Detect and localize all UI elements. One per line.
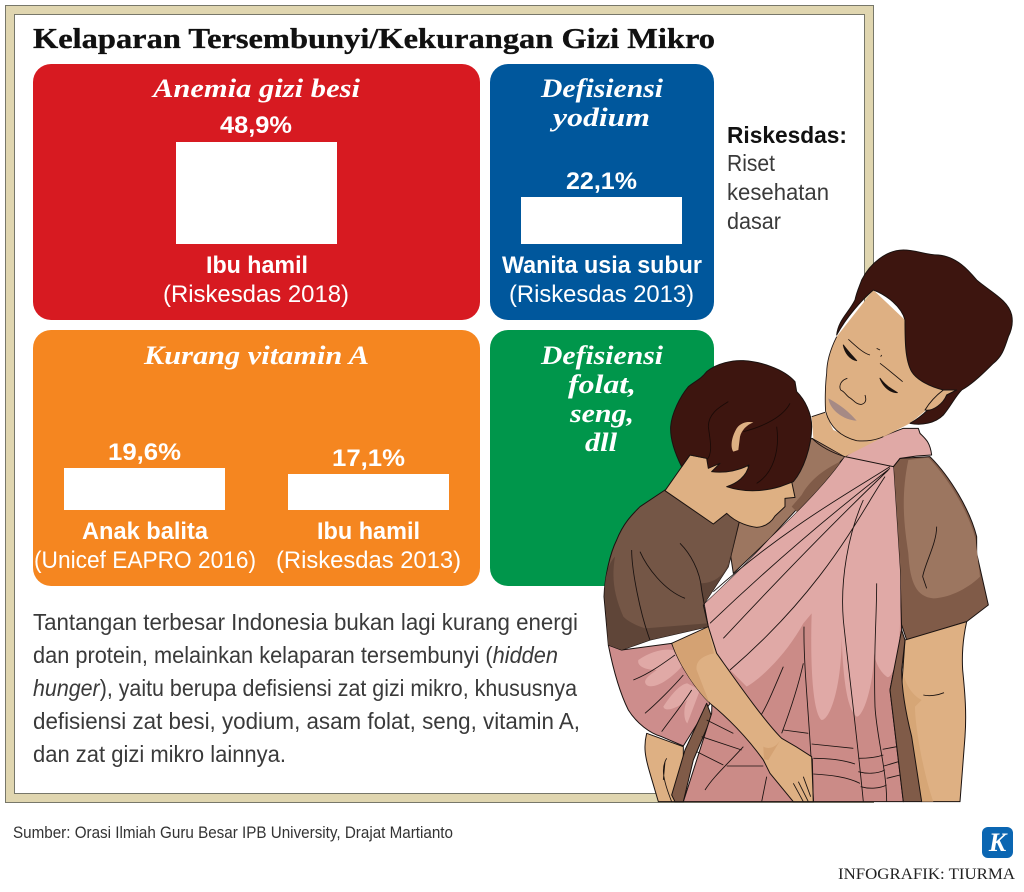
- child shirt folds: [632, 543, 708, 640]
- frame: [6, 6, 874, 802]
- logo: Kompas: [982, 827, 1013, 858]
- mother left fingers: [663, 758, 672, 802]
- bar: 19,6%: [64, 468, 225, 510]
- sleeve highlight: [904, 458, 980, 598]
- mother body: [604, 428, 988, 802]
- mother left hand: [645, 733, 683, 802]
- back sling folds: [633, 655, 692, 732]
- illustration: mother and child: [604, 250, 1012, 802]
- heading: kurang vitamin A: Kurang vitamin A: [143, 341, 369, 370]
- heading: defisiensi yodium: yodium: [549, 103, 650, 132]
- note: riskesdas: [727, 122, 847, 234]
- panel: defisiensi yodium: [490, 64, 714, 320]
- value: 17,1%: 17,1%: [332, 445, 405, 472]
- mother brows and nose: [840, 339, 903, 404]
- mother face: [825, 290, 947, 441]
- logo: Kompas: K: [988, 828, 1008, 857]
- value: 19,6%: 19,6%: [108, 439, 181, 466]
- label: anak balita: Anak balita: [82, 518, 209, 545]
- heading: defisiensi folat seng dll: [540, 341, 664, 457]
- bar: 48,9%: [176, 142, 337, 244]
- heads: [665, 250, 1012, 527]
- label: ibu hamil: Ibu hamil: [317, 518, 420, 545]
- sling folds: [697, 467, 900, 802]
- mother eyes: [843, 345, 897, 393]
- source: unicef: (Unicef EAPRO 2016): [34, 547, 256, 574]
- label: ibu hamil: Ibu hamil: [206, 252, 308, 279]
- back sling: [608, 643, 710, 746]
- strap: [672, 703, 712, 802]
- child face: [665, 455, 795, 527]
- sling knot: [845, 428, 932, 467]
- bar: 17,1%: [288, 474, 449, 510]
- heading: defisiensi yodium: Defisiensi: [540, 74, 664, 103]
- neck outline: [812, 412, 845, 457]
- title: Kelaparan Tersembunyi/Kekurangan Gizi Mikro: [33, 23, 715, 55]
- source: riskesdas 2013: (Riskesdas 2013): [276, 547, 461, 574]
- child arm: [672, 627, 813, 802]
- child fingers: [793, 758, 813, 802]
- arm shade: [903, 677, 933, 802]
- heading: defisiensi folat seng dll: seng,: [569, 399, 634, 428]
- body text: Tantangan terbesar Indonesia bukan lagi kurang energi: [33, 609, 578, 635]
- panel: kurang vitamin A: [33, 330, 480, 586]
- heading: defisiensi folat seng dll: dll: [585, 428, 618, 457]
- child shirt shadow: [605, 523, 739, 650]
- note: riskesdas: Riset: [727, 150, 776, 176]
- child hair: [671, 361, 812, 491]
- panel: defisiensi folat seng: [490, 330, 714, 586]
- strap right: [890, 630, 922, 802]
- body text: dan zat gizi mikro lainnya.: [33, 741, 286, 767]
- child shirt: [604, 490, 739, 650]
- source: Sumber: Orasi Ilmiah Guru Besar IPB University, Drajat Martianto: [13, 824, 453, 842]
- mother right sleeve: [893, 457, 988, 640]
- bar: 22,1%: [521, 197, 682, 244]
- child ear: [732, 422, 753, 452]
- mother hair: [837, 250, 1012, 424]
- note: riskesdas: dasar: [727, 208, 781, 234]
- child hair lines: [707, 402, 790, 483]
- panel: anemia gizi besi: [33, 64, 480, 320]
- value: 22,1%: 22,1%: [566, 168, 637, 195]
- sleeve crease: [923, 527, 937, 588]
- value: 48,9%: 48,9%: [220, 112, 292, 139]
- elbow crease: [923, 693, 944, 696]
- face outline: [825, 337, 883, 441]
- mother lips: [828, 398, 857, 421]
- mother ear: [925, 390, 957, 410]
- body text: [33, 609, 580, 767]
- body text: hunger), yaitu berupa defisiensi zat gizi mikro, khususnya: [33, 675, 577, 701]
- mother chest shirt: [727, 438, 845, 573]
- sling body: [683, 457, 903, 802]
- source: riskesdas 2013: (Riskesdas 2013): [509, 281, 694, 308]
- child arm shade: [672, 627, 781, 760]
- label: wanita usia subur: Wanita usia subur: [502, 252, 702, 279]
- back sling highlights: [638, 650, 700, 723]
- credit: INFOGRAFIK: TIURMA: [838, 866, 1015, 883]
- mother right arm: [902, 622, 967, 802]
- heading: defisiensi folat seng dll: Defisiensi: [540, 341, 664, 370]
- source: riskesdas 2018: (Riskesdas 2018): [163, 281, 349, 308]
- body text: dan protein, melainkan kelaparan tersembunyi (hidden: [33, 642, 558, 668]
- body text: defisiensi zat besi, yodium, asam folat, seng, vitamin A,: [33, 708, 580, 734]
- heading: defisiensi yodium: [540, 74, 664, 132]
- heading: defisiensi folat seng dll: folat,: [568, 370, 636, 399]
- chest shadow: [792, 462, 840, 512]
- mother neck: [812, 412, 910, 457]
- note: riskesdas: kesehatan: [727, 179, 829, 205]
- sling highlight: [703, 457, 900, 720]
- note: riskesdas: Riskesdas:: [727, 122, 847, 148]
- heading: anemia: Anemia gizi besi: [151, 74, 361, 103]
